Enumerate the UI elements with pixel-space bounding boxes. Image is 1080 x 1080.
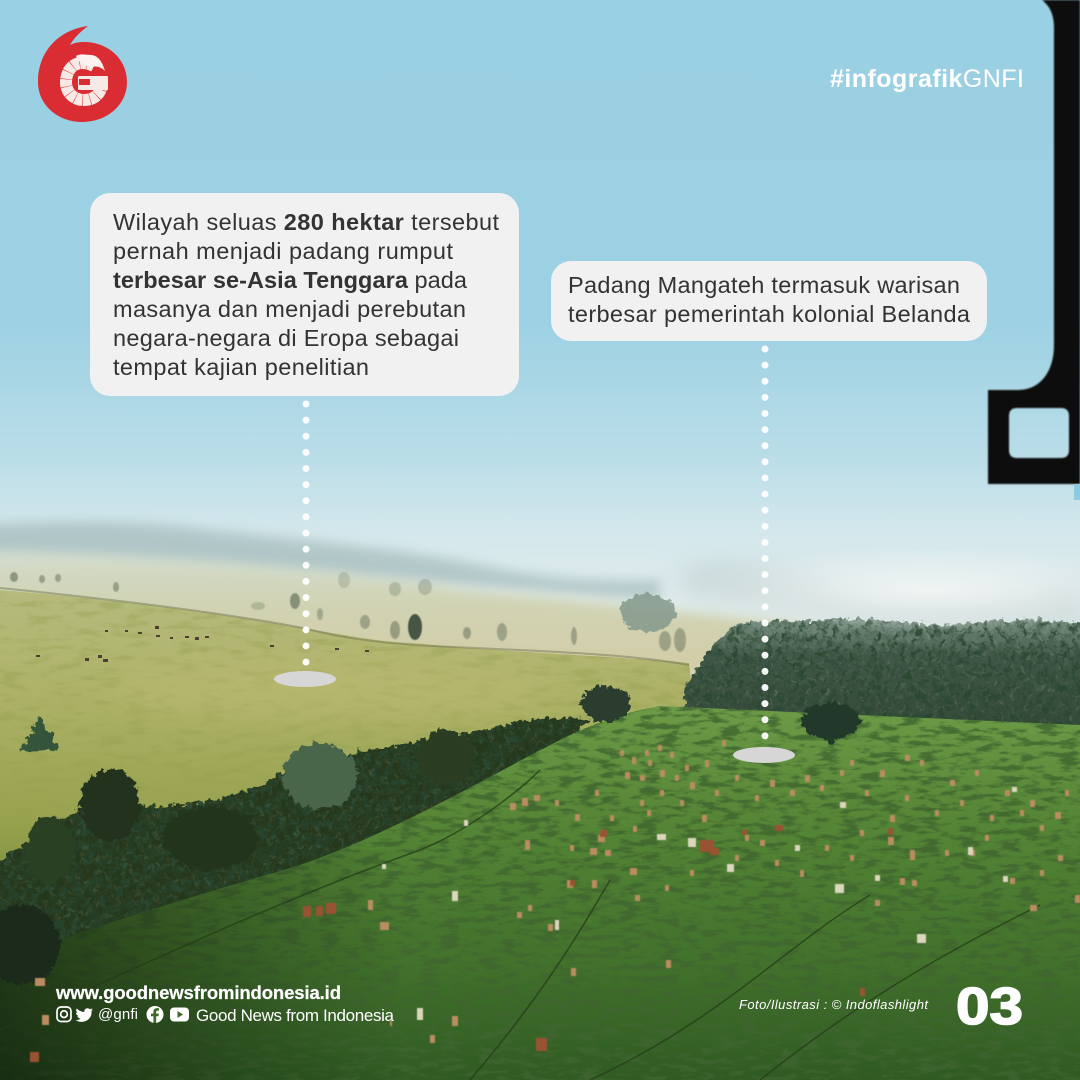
main green foreground hill: [0, 706, 1080, 1080]
vehicle tracks: [0, 770, 1040, 1080]
icon: facebook: [146, 1006, 164, 1023]
dark tree cluster: [80, 769, 140, 841]
callout text: Wilayah seluas 280 hektar tersebut: [113, 209, 499, 235]
callout marker: right pointer: [733, 349, 795, 763]
callout background: [90, 193, 519, 396]
channel name: Good News from Indonesia: [196, 1006, 395, 1025]
logo red drop: [38, 26, 127, 122]
social handle: @gnfi: [98, 1006, 138, 1023]
valley dark bushes on left: [0, 716, 592, 940]
pale far field: [0, 552, 800, 680]
callout background: [551, 261, 987, 341]
sunlit patch on left hill: [110, 660, 550, 720]
photo credit: Foto/Ilustrasi : © Indoflashlight: [739, 997, 929, 1012]
cattle: tan: [35, 740, 1080, 1043]
small trees on far field: [10, 572, 686, 652]
background: misty landscape photo: [0, 522, 1080, 1080]
icon: instagram: [57, 1007, 71, 1022]
marker ellipse: [733, 747, 795, 763]
tree with pale blossoms: [283, 743, 357, 809]
marker ellipse: [274, 671, 336, 687]
logo white garuda G: [66, 54, 108, 100]
fog over the right horizon: [690, 548, 1080, 632]
callout text: [568, 272, 971, 327]
page number: 03: [956, 978, 1023, 1036]
lone tree on green hill: [802, 702, 860, 740]
icon: black film frame on right: [988, 0, 1080, 500]
misty round tree: [620, 594, 676, 632]
callout text: terbesar pemerintah kolonial Belanda: [568, 301, 971, 327]
sheep on left hill: [36, 626, 369, 662]
distant misty trees on the right: [680, 567, 1080, 625]
callout text: [113, 209, 499, 380]
cattle: white: [382, 787, 1017, 1020]
panel: callout right: [551, 261, 987, 341]
distant tree line: [0, 522, 660, 600]
dotted line: [302, 404, 310, 678]
grass texture: [0, 700, 1080, 1080]
callout text: tempat kajian penelitian: [113, 354, 369, 380]
small blue strip under frame: [1074, 484, 1080, 500]
left hill grass texture: [0, 598, 690, 720]
callout text: pernah menjadi padang rumput: [113, 238, 453, 264]
callout marker: left pointer: [274, 404, 336, 687]
icon: twitter: [76, 1008, 93, 1022]
dotted line: [762, 349, 768, 752]
tree near left edge: [20, 717, 60, 752]
callout text: Padang Mangateh termasuk warisan: [568, 272, 960, 298]
cattle group: [30, 740, 1080, 1062]
bush tree on ridge: [581, 686, 631, 722]
callout text: masanya dan menjadi perebutan: [113, 296, 466, 322]
callout text: terbesar se-Asia Tenggara pada: [113, 267, 468, 293]
panel: callout left: [90, 193, 519, 396]
website url: www.goodnewsfromindonesia.id: [55, 982, 341, 1003]
hill boundary hedge line: [0, 588, 689, 665]
logo: GNFI: [38, 26, 127, 122]
main right tree band: [682, 616, 1080, 725]
left yellow-green hill: [0, 590, 700, 1050]
hashtag heading: #infografikGNFI: [830, 65, 1024, 93]
dark tree bottom left: [0, 905, 60, 985]
icon: youtube: [170, 1008, 189, 1022]
footer: website and social media: [55, 982, 395, 1025]
cattle: reddish brown: [30, 825, 893, 1062]
callout text: negara-negara di Eropa sebagai: [113, 325, 459, 351]
shadow over lower left: [0, 851, 346, 1080]
foreground trees: [0, 686, 860, 985]
